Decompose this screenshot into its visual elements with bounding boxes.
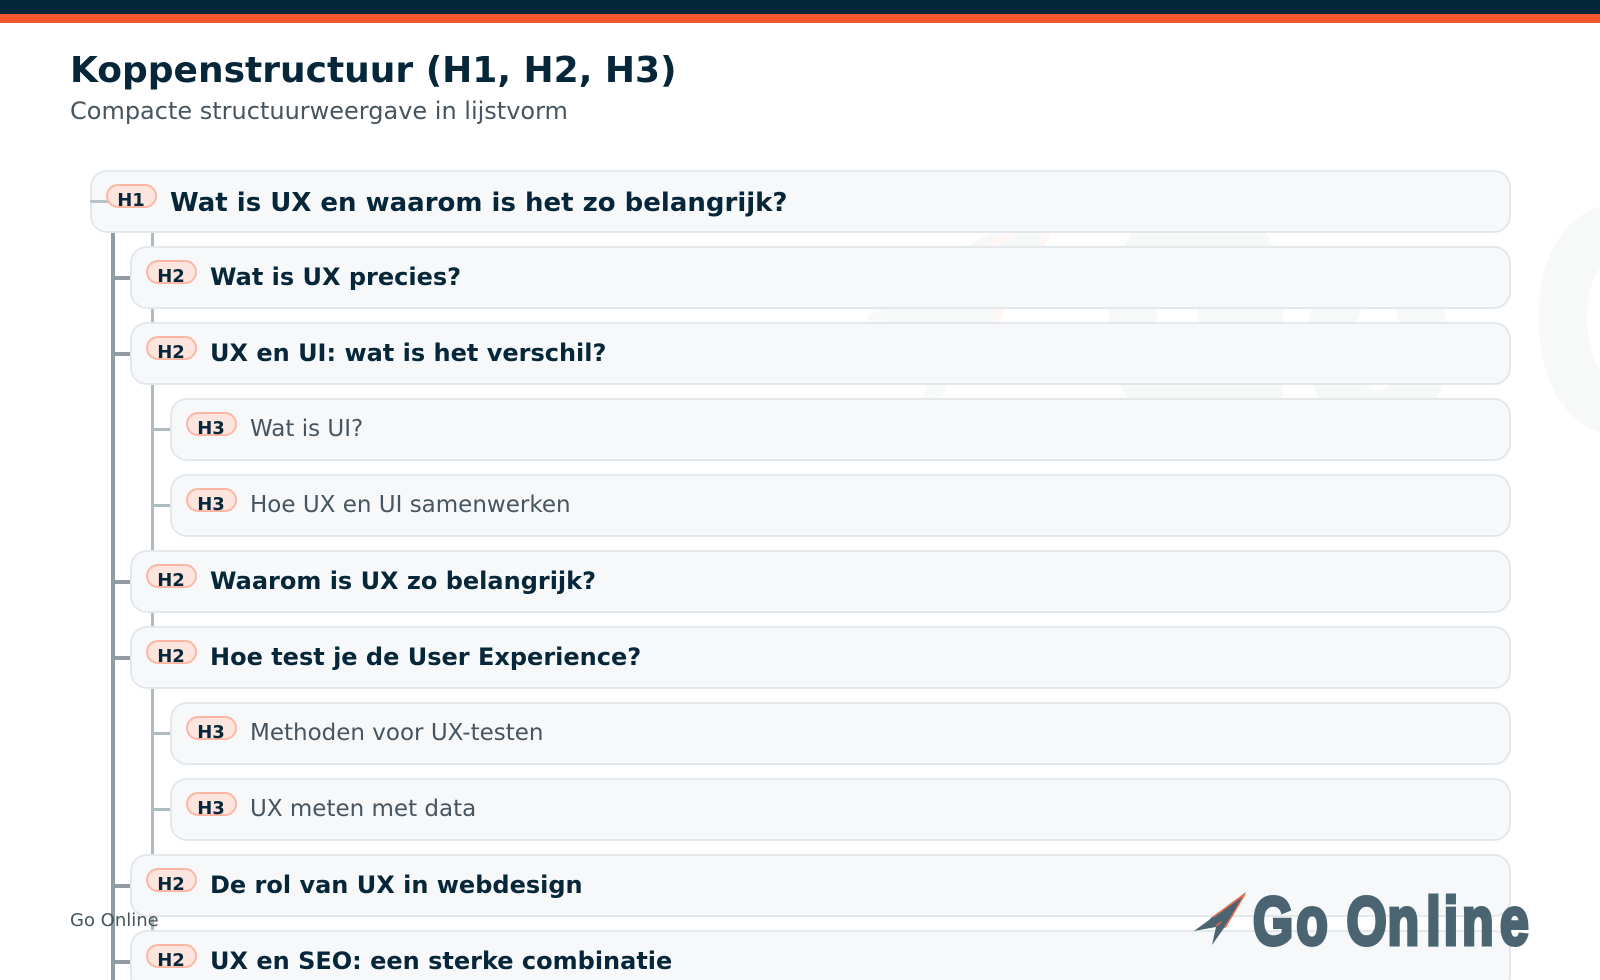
item: H2 Wat is UX precies? bbox=[113, 247, 1510, 308]
item: H3 Hoe UX en UI samenwerken: Hoe UX en UI samenwerken bbox=[250, 492, 571, 518]
item: H1 Wat is UX en waarom is het zo belangrijk?: H1 bbox=[117, 190, 145, 211]
item: H2 Wat is UX precies?: H2 bbox=[157, 266, 185, 287]
item: H2 De rol van UX in webdesign bbox=[113, 855, 1510, 916]
icon: paper plane bbox=[1194, 892, 1246, 945]
main tree spine bbox=[111, 233, 115, 980]
item: H1 Wat is UX en waarom is het zo belangrijk?: Wat is UX en waarom is het zo belangrijk? bbox=[170, 188, 788, 218]
item: H3 UX meten met data: UX meten met data bbox=[250, 796, 476, 822]
item: H2 Hoe test je de User Experience?: Hoe test je de User Experience? bbox=[210, 643, 641, 671]
item: H1 Wat is UX en waarom is het zo belangrijk? bbox=[90, 171, 1510, 232]
item: H3 Wat is UI?: Wat is UI? bbox=[250, 416, 363, 442]
item: H2 UX en SEO: een sterke combinatie bbox=[113, 931, 1510, 980]
subtitle: Compacte structuurweergave in lijstvorm bbox=[70, 97, 568, 125]
item: H3 Wat is UI? bbox=[153, 399, 1510, 460]
item: H3 Methoden voor UX-testen bbox=[153, 703, 1510, 764]
item: H2 Hoe test je de User Experience? bbox=[113, 627, 1510, 688]
item: H3 Hoe UX en UI samenwerken bbox=[153, 475, 1510, 536]
item: H2 De rol van UX in webdesign: De rol van UX in webdesign bbox=[210, 871, 583, 899]
item: H2 UX en UI: H2 bbox=[157, 342, 185, 363]
secondary tree line bbox=[151, 233, 154, 980]
title: Koppenstructuur (H1, H2, H3) bbox=[70, 50, 677, 91]
item: H2 De rol van UX in webdesign: H2 bbox=[157, 874, 185, 895]
item: H2 Waarom is UX zo belangrijk? bbox=[113, 551, 1510, 612]
item: H2 UX en SEO: een sterke combinatie: H2 bbox=[157, 950, 185, 971]
footer label: Go Online bbox=[70, 910, 159, 931]
item: H2 Wat is UX precies?: Wat is UX precies? bbox=[210, 263, 461, 291]
item: H3 Methoden voor UX-testen: Methoden voor UX-testen bbox=[250, 720, 543, 746]
item: H2 Hoe test je de User Experience?: H2 bbox=[157, 646, 185, 667]
watermark logo bbox=[835, 149, 1600, 491]
logo: Go Online: Go Online bbox=[1253, 883, 1529, 959]
item: H3 UX meten met data: H3 bbox=[197, 798, 225, 819]
item: H2 Waarom is UX zo belangrijk?: Waarom is UX zo belangrijk? bbox=[210, 567, 596, 595]
item: H3 UX meten met data bbox=[153, 779, 1510, 840]
item: H2 UX en UI: UX en UI: wat is het verschil? bbox=[210, 339, 606, 367]
item: H2 UX en UI bbox=[113, 323, 1510, 384]
item: H3 Hoe UX en UI samenwerken: H3 bbox=[197, 494, 225, 515]
top bar bbox=[0, 0, 1600, 23]
item: H3 Wat is UI?: H3 bbox=[197, 418, 225, 439]
item: H3 Methoden voor UX-testen: H3 bbox=[197, 722, 225, 743]
item: H2 UX en SEO: een sterke combinatie: UX en SEO: een sterke combinatie bbox=[210, 947, 672, 975]
item: H2 Waarom is UX zo belangrijk?: H2 bbox=[157, 570, 185, 591]
